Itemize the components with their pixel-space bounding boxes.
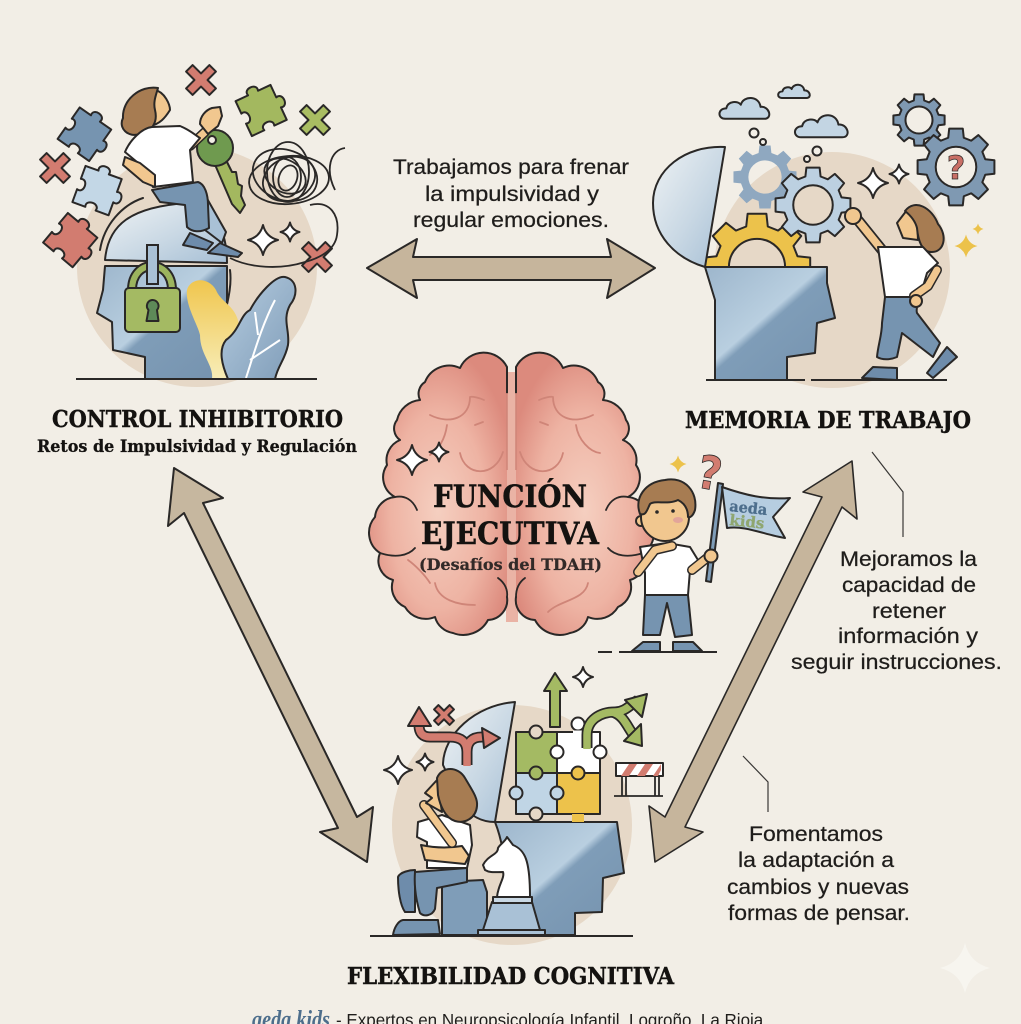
section label: control inhibitorio: Retos de Impulsividad y Regulación <box>37 437 357 457</box>
head silhouette <box>97 266 227 379</box>
blue back gear <box>733 145 797 209</box>
barrier <box>614 763 663 796</box>
section label: control inhibitorio <box>37 406 357 457</box>
callout connector: memoria <box>872 452 903 537</box>
brain title: EJECUTIVA <box>421 516 600 552</box>
ear <box>636 516 646 526</box>
yellow gear <box>706 212 812 266</box>
boy with flag <box>598 445 790 652</box>
flag <box>722 487 790 538</box>
light blue gear <box>776 168 850 242</box>
brain title <box>419 477 602 574</box>
sparkles <box>858 164 984 258</box>
callout: frenar impulsividad <box>393 155 629 232</box>
motion arcs <box>100 198 231 318</box>
brain folds <box>408 397 600 612</box>
hand <box>704 550 718 562</box>
pants <box>643 595 692 637</box>
callout: memoria: seguir instrucciones. <box>791 650 1002 674</box>
head silhouette <box>705 267 835 380</box>
puzzle piece green <box>233 77 292 136</box>
puzzle piece blue <box>58 102 120 165</box>
flag: kids <box>729 511 765 533</box>
sparkles <box>248 222 300 255</box>
right hemisphere <box>516 353 654 635</box>
brain title: (Desafíos del TDAH) <box>419 555 602 574</box>
right hemisphere outline <box>516 353 654 635</box>
callout: memoria: retener <box>872 599 946 623</box>
green cross <box>292 97 338 143</box>
gold star <box>670 456 686 472</box>
chess knight <box>478 837 545 935</box>
left hemisphere outline <box>369 353 507 635</box>
brain <box>369 353 654 635</box>
callout: flexibilidad <box>727 822 910 925</box>
callout: memoria: Mejoramos la <box>840 547 977 571</box>
sparkles <box>384 667 593 784</box>
padlock <box>125 245 180 332</box>
red cross right <box>294 234 340 280</box>
question mark: ? <box>693 445 726 502</box>
flag: aeda <box>729 497 769 519</box>
left hemisphere <box>369 353 507 635</box>
callout: frenar impulsividad: regular emociones. <box>413 208 609 232</box>
green up arrow <box>544 673 567 727</box>
decorative corner sparkle <box>940 943 990 993</box>
panel: flexibilidad cognitiva illustration <box>370 667 663 945</box>
seated person <box>393 769 487 935</box>
brain title: FUNCIÓN <box>433 477 587 515</box>
ground line <box>76 378 317 380</box>
sparkles <box>397 442 448 475</box>
callout: frenar impulsividad: Trabajamos para frenar <box>393 155 629 179</box>
hair <box>638 479 695 517</box>
shirt <box>640 543 698 595</box>
red fork arrow <box>408 707 500 766</box>
section label: control inhibitorio: CONTROL INHIBITORIO <box>52 406 343 433</box>
arrow: left diagonal double <box>168 468 373 862</box>
puzzle piece light blue <box>72 160 130 217</box>
arrow: horizontal double <box>367 239 655 298</box>
scribble <box>230 140 345 267</box>
red cross left <box>32 145 78 191</box>
person reaching <box>845 205 957 380</box>
open skull flap <box>653 147 725 267</box>
callout: flexibilidad: cambios y nuevas <box>727 875 909 899</box>
leaf <box>222 277 295 379</box>
backdrop circle <box>77 147 317 387</box>
section label: memoria de trabajo: MEMORIA DE TRABAJO <box>685 407 971 434</box>
red cross <box>428 699 460 731</box>
shoes <box>632 642 660 651</box>
ground <box>598 651 717 653</box>
head silhouette <box>495 822 624 935</box>
arms <box>638 546 672 572</box>
callout: frenar impulsividad: la impulsividad y <box>425 182 599 206</box>
puzzle block <box>510 718 606 822</box>
question gear <box>918 129 994 205</box>
ground line <box>370 935 633 937</box>
arrow: right diagonal double <box>649 461 857 862</box>
callout: memoria: información y <box>838 624 978 648</box>
brain stem center <box>506 372 518 622</box>
brain center lines <box>507 393 516 470</box>
callout connector: flexibilidad <box>743 756 768 812</box>
footer <box>252 1007 768 1024</box>
key <box>197 130 245 213</box>
backdrop circle <box>714 152 950 388</box>
red cross top <box>178 57 224 103</box>
callout: flexibilidad: la adaptación a <box>738 848 894 872</box>
person sitting <box>122 88 242 257</box>
callout: memoria <box>791 547 1002 674</box>
top right gear <box>893 94 945 146</box>
callout: flexibilidad: Fomentamos <box>749 822 883 846</box>
callout: flexibilidad: formas de pensar. <box>728 901 910 925</box>
clouds <box>719 85 848 162</box>
ground line <box>706 379 947 381</box>
flag pole <box>706 483 723 582</box>
backdrop circle <box>392 705 632 945</box>
panel: control inhibitorio illustration <box>32 57 345 387</box>
panel: memoria de trabajo illustration <box>653 85 994 388</box>
open skull flap <box>443 702 515 822</box>
green fork arrow <box>587 694 647 749</box>
callout: memoria: capacidad de <box>842 573 976 597</box>
question gear: ? <box>947 149 965 187</box>
puzzle piece red <box>43 208 106 271</box>
yellow glow <box>187 280 240 379</box>
open skull dome <box>105 203 227 263</box>
section label: flexibilidad cognitiva: FLEXIBILIDAD COGNITIVA <box>347 963 675 990</box>
face <box>641 493 689 541</box>
